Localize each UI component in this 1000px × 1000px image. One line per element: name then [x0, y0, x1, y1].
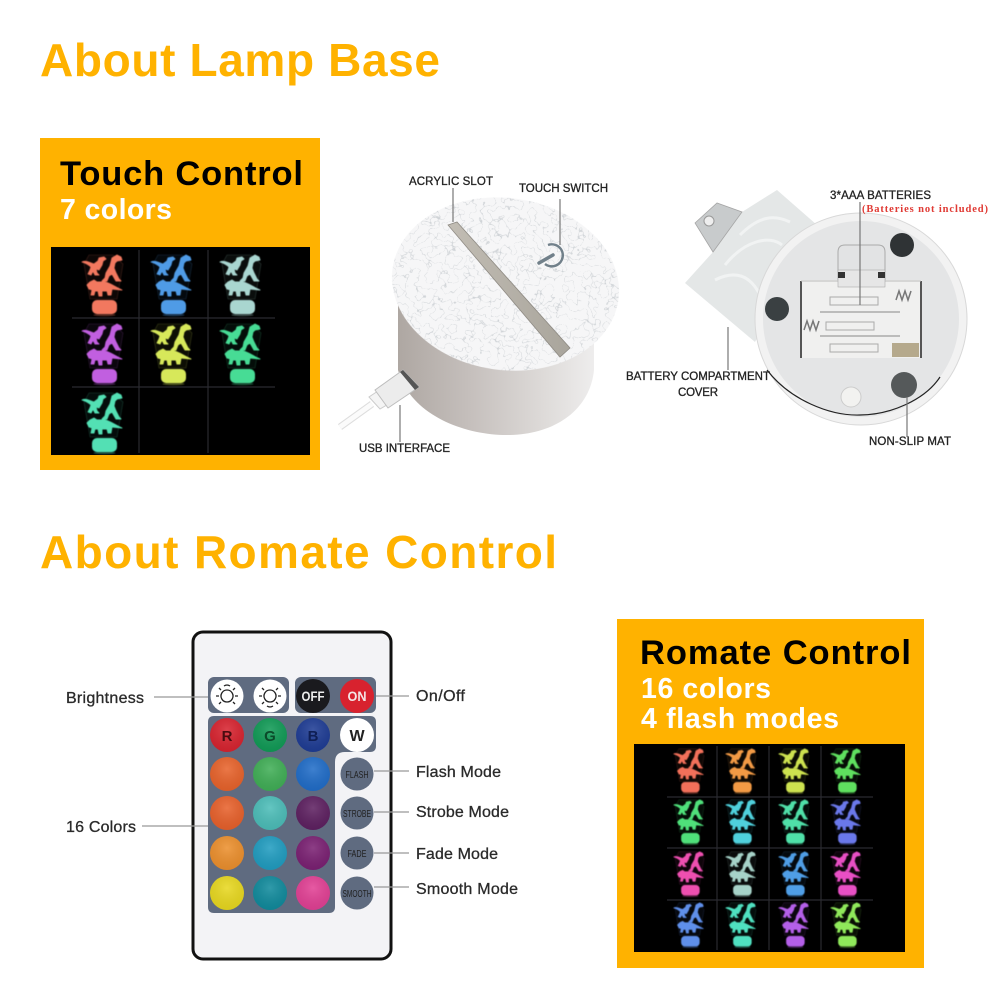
leader lines: [728, 202, 907, 437]
panel title: Romate Control: Romate Control: [640, 634, 911, 672]
base disc: [755, 213, 967, 425]
label: touch switch: TOUCH SWITCH: [519, 183, 608, 195]
label: Strobe Mode: Strobe Mode: [416, 804, 509, 821]
non-slip foot left: [765, 297, 789, 321]
leader lines: [400, 188, 560, 442]
label: batteries not included: (Batteries not included): [862, 204, 988, 215]
battery compartment: [800, 270, 922, 358]
acrylic slot: [448, 222, 570, 357]
diagram: lamp base top view: [340, 176, 630, 455]
touch switch icon: [539, 244, 563, 266]
diagram: lamp base underside: [626, 190, 988, 448]
lamps: row 2: [674, 800, 861, 845]
label: Fade Mode: Fade Mode: [416, 846, 498, 863]
mode buttons: STROBE: [343, 809, 371, 820]
heading: About Lamp Base: About Lamp Base: [40, 34, 440, 86]
colour button panel: [208, 716, 376, 913]
label: 16 Colors: 16 Colors: [66, 819, 136, 836]
colour button panel: R: [222, 728, 233, 745]
base body: [398, 300, 594, 435]
lamps: row 1: [674, 749, 861, 794]
label: cover: COVER: [678, 387, 718, 399]
label: On/Off: On/Off: [416, 688, 466, 705]
on/off button group: OFF: [302, 688, 325, 704]
battery cover: [685, 190, 817, 342]
non-slip foot top right: [890, 233, 914, 257]
colour button panel: W: [349, 728, 365, 745]
lamp: red: [82, 255, 123, 316]
inner disc: [763, 221, 959, 417]
label: USB interface: USB INTERFACE: [359, 443, 450, 455]
remote body: [193, 632, 391, 959]
battery latch: [838, 245, 885, 285]
lamp: pale cyan: [220, 255, 261, 316]
panel subtitle: 4 flash modes: 4 flash modes: [641, 703, 839, 735]
crackle top surface: [381, 183, 630, 385]
panel subtitle: 16 colors: 16 colors: [641, 673, 771, 705]
lamps: row 3: [674, 852, 861, 897]
brightness button group: [208, 677, 289, 713]
lamp: yellow: [151, 324, 192, 385]
on/off button group: ON: [348, 688, 366, 704]
panel title: Touch Control: Touch Control: [60, 155, 303, 193]
colour button panel: B: [308, 728, 319, 745]
label: acrylic slot: ACRYLIC SLOT: [409, 176, 493, 188]
label: Brightness: Brightness: [66, 690, 144, 707]
mode buttons: FLASH: [346, 770, 368, 781]
USB cable: [340, 404, 372, 427]
leader lines: [142, 696, 409, 887]
lamp grid: 16 colors: [634, 744, 905, 952]
panel subtitle: 7 colors: 7 colors: [60, 194, 172, 226]
panel: remote control: [617, 619, 924, 968]
label: Flash Mode: Flash Mode: [416, 764, 501, 781]
on/off button group: [295, 677, 376, 713]
mode buttons: SMOOTH: [342, 889, 372, 900]
diagram: remote control: [66, 632, 518, 959]
USB connector: [369, 370, 419, 409]
lamp: green: [220, 324, 261, 385]
USB port sticker: [841, 387, 861, 407]
label: Smooth Mode: Smooth Mode: [416, 881, 518, 898]
non-slip foot bottom: [891, 372, 917, 398]
label: non-slip mat: NON-SLIP MAT: [869, 436, 951, 448]
lamp grid: 7 colors: [51, 247, 310, 455]
lamp: purple: [82, 324, 123, 385]
disc edge shadow: [767, 370, 940, 415]
label: battery compartment cover: BATTERY COMPARTMENT: [626, 371, 770, 383]
lamp: aqua: [82, 393, 123, 454]
colour button panel: G: [264, 728, 276, 745]
mode buttons: [340, 758, 374, 910]
heading: About Romate Control: About Romate Control: [40, 526, 557, 578]
lamps: row 4: [674, 903, 861, 948]
label: batteries: 3*AAA BATTERIES: [830, 190, 931, 202]
mode buttons: FADE: [348, 849, 367, 860]
lamp: blue: [151, 255, 192, 316]
panel: touch control: [40, 138, 320, 470]
